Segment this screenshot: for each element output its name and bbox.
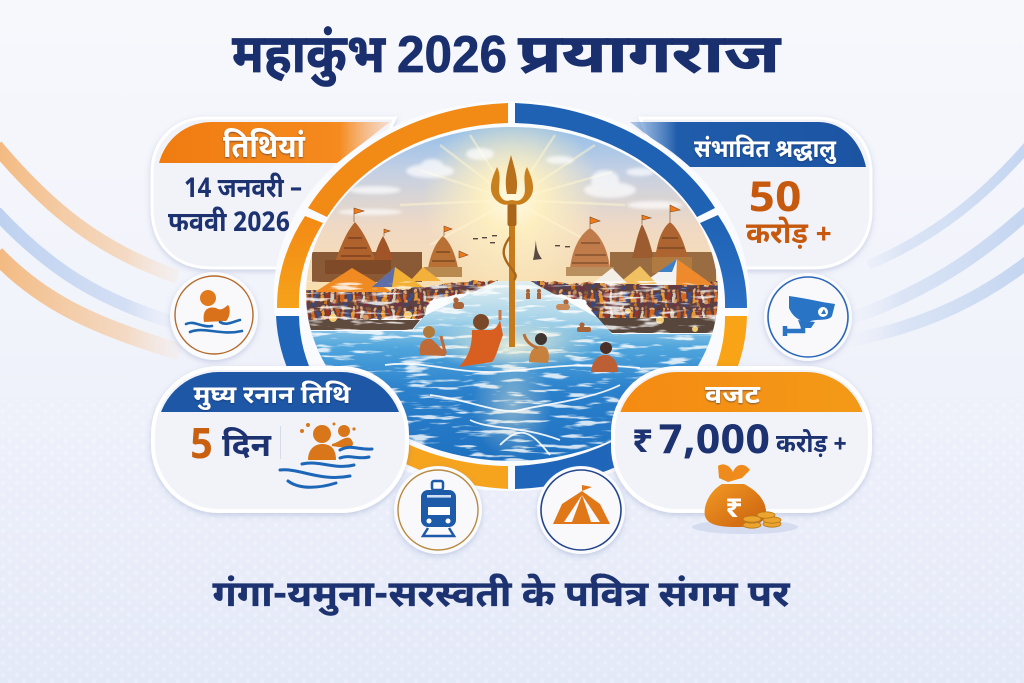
bather right	[591, 342, 618, 372]
bath heading: मुघ्य रनान तिथि	[194, 380, 352, 414]
ring segments	[276, 103, 747, 489]
panel: main bath dates	[150, 368, 412, 511]
temple flags	[354, 205, 680, 258]
distant bathers	[453, 289, 591, 332]
pilgrims value: 50	[748, 174, 802, 228]
icon: bathers in waves	[280, 422, 372, 487]
pilgrims value	[746, 174, 832, 256]
title: प्रयागराज	[518, 25, 782, 95]
sun rays	[400, 135, 625, 245]
budget value	[632, 418, 847, 470]
pilgrims header band	[630, 122, 866, 167]
budget value: ₹	[632, 420, 653, 467]
crowd left	[306, 280, 498, 322]
budget value: करोड़ +	[776, 429, 847, 463]
bath header band	[150, 372, 412, 412]
icon: security camera	[764, 273, 852, 361]
panel: dates	[152, 118, 395, 268]
saint in orange robe	[459, 310, 503, 367]
river	[300, 281, 724, 470]
temples left	[312, 222, 462, 282]
ring	[274, 101, 750, 491]
budget value: 7,000	[658, 418, 770, 470]
bath value: दिन	[222, 427, 272, 470]
central scene	[306, 127, 718, 461]
title: महाकुंभ	[232, 25, 386, 95]
budget heading: वजट	[705, 380, 761, 414]
budget header band	[610, 372, 874, 412]
trident	[491, 155, 533, 347]
icon: train	[394, 466, 482, 554]
dates header band	[159, 122, 390, 163]
bath value: 5	[190, 421, 213, 476]
sky	[300, 125, 730, 290]
tents left	[315, 267, 441, 292]
dates value: 14 जनवरी –	[184, 173, 302, 209]
dates value	[168, 173, 302, 243]
bather centre	[524, 333, 549, 363]
pilgrims value: करोड़ +	[746, 216, 832, 256]
title	[232, 25, 782, 95]
clouds	[338, 148, 683, 215]
panel: budget	[610, 368, 874, 534]
dates heading: तिथियां	[223, 128, 306, 171]
bather left	[420, 326, 447, 356]
temples right	[566, 222, 716, 282]
birds and boat	[473, 235, 570, 260]
decorative swooshes left	[0, 146, 180, 352]
ghats	[304, 308, 722, 333]
icon: money bag	[692, 464, 798, 534]
icon: tent	[537, 466, 625, 554]
title: 2026	[397, 26, 507, 84]
sun glow	[435, 127, 588, 264]
icon: money bag: ₹	[725, 491, 743, 530]
icon: bathing devotee	[170, 272, 258, 360]
tents right	[593, 259, 713, 285]
bath value	[190, 421, 272, 476]
panel: expected pilgrims	[630, 118, 871, 268]
decorative swooshes right	[852, 146, 1024, 340]
dates value: फववी 2026	[168, 207, 290, 243]
footer tagline: गंगा-यमुना-सरस्वती के पवित्र संगम पर	[212, 572, 791, 621]
crowd right	[530, 281, 722, 320]
pilgrims heading: संभावित श्रद्धालु	[694, 134, 837, 168]
